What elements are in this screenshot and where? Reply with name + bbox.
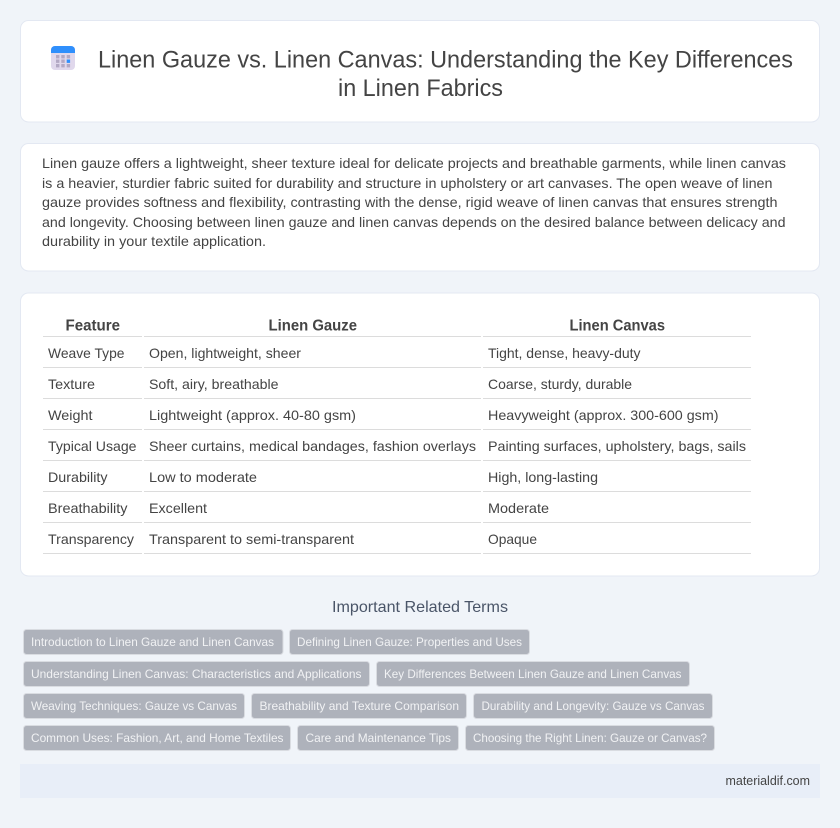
title: in Linen Fabrics: [338, 75, 503, 102]
intro paragraph: [42, 155, 786, 249]
chip: Durability and Longevity: Gauze vs Canvas: [482, 699, 704, 713]
footer source: materialdif.com: [726, 774, 810, 788]
chip: [466, 726, 714, 750]
table header row: [66, 318, 665, 334]
row: durability: High, long-lasting: [488, 469, 598, 485]
row: texture: Soft, airy, breathable: [149, 376, 279, 392]
chip: [24, 694, 244, 718]
row: breathability: Breathability: [48, 500, 128, 516]
chip: Choosing the Right Linen: Gauze or Canvas?: [473, 731, 707, 745]
row: weave type: Tight, dense, heavy-duty: [488, 345, 640, 361]
chip: [474, 694, 712, 718]
row: weight: Lightweight (approx. 40-80 gsm): [149, 407, 356, 423]
row: durability: Low to moderate: [149, 469, 257, 485]
row: breathability: Moderate: [488, 500, 549, 516]
row: weight: Heavyweight (approx. 300-600 gsm): [488, 407, 718, 423]
intro paragraph: durability in your textile application.: [42, 233, 266, 249]
chip: Understanding Linen Canvas: Characteristics and Applications: [31, 667, 362, 681]
row: typical usage: Typical Usage: [48, 438, 137, 454]
row: transparency: Transparency: [48, 531, 134, 547]
panel: header: [20, 20, 820, 122]
chip: Common Uses: Fashion, Art, and Home Textiles: [31, 731, 284, 745]
intro paragraph: Linen gauze offers a lightweight, sheer texture ideal for delicate projects and breathable garments, while linen canvas: [42, 155, 786, 171]
row: texture: Coarse, sturdy, durable: [488, 376, 632, 392]
row: weight: [48, 407, 718, 423]
intro paragraph: gauze provides softness and flexibility, contrasting with the dense, rigid weave of linen canvas that ensures strength: [42, 194, 778, 210]
row: typical usage: [48, 438, 746, 454]
chip: [290, 630, 530, 654]
row: durability: [48, 469, 598, 485]
row: weave type: [48, 345, 640, 361]
chip: Weaving Techniques: Gauze vs Canvas: [31, 699, 237, 713]
panel: intro text: [20, 144, 820, 271]
chip: [24, 662, 370, 686]
chip: Key Differences Between Linen Gauze and Linen Canvas: [384, 667, 682, 681]
chip: Introduction to Linen Gauze and Linen Canvas: [31, 635, 274, 649]
panel: comparison table: [20, 293, 820, 576]
icon: calendar: [51, 46, 75, 70]
row: durability: Durability: [48, 469, 108, 485]
table grid lines: [43, 336, 751, 554]
table header row: Linen Canvas: [570, 318, 665, 334]
intro paragraph: is a heavier, sturdier fabric suited for durability and structure in upholstery or art canvases. The open weave of linen: [42, 175, 772, 191]
row: breathability: [48, 500, 549, 516]
title: Linen Gauze vs. Linen Canvas: Understanding the Key Differences: [98, 46, 793, 74]
title: [98, 46, 793, 102]
chip: [252, 694, 466, 718]
row: weave type: Open, lightweight, sheer: [149, 345, 301, 361]
row: weight: Weight: [48, 407, 93, 423]
chip: [24, 630, 283, 654]
table header row: Feature: [66, 318, 120, 334]
chip: Defining Linen Gauze: Properties and Uses: [297, 635, 522, 649]
row: breathability: Excellent: [149, 500, 207, 516]
row: texture: [48, 376, 632, 392]
heading: important related terms: Important Related Terms: [332, 599, 508, 616]
related term chips: [24, 630, 714, 750]
row: typical usage: Painting surfaces, upholstery, bags, sails: [488, 438, 746, 454]
footer band: [20, 764, 820, 798]
chip: [298, 726, 458, 750]
table header row: Linen Gauze: [268, 318, 357, 334]
row: typical usage: Sheer curtains, medical bandages, fashion overlays: [149, 438, 476, 454]
chip: [24, 726, 290, 750]
row: transparency: Transparent to semi-transparent: [149, 531, 354, 547]
row: transparency: [48, 531, 537, 547]
chip: Breathability and Texture Comparison: [260, 699, 459, 713]
row: texture: Texture: [48, 376, 95, 392]
row: weave type: Weave Type: [48, 345, 125, 361]
chip: Care and Maintenance Tips: [306, 731, 451, 745]
chip: [376, 662, 690, 686]
intro paragraph: and longevity. Choosing between linen gauze and linen canvas depends on the desired balance between delicacy and: [42, 214, 786, 230]
row: transparency: Opaque: [488, 531, 537, 547]
